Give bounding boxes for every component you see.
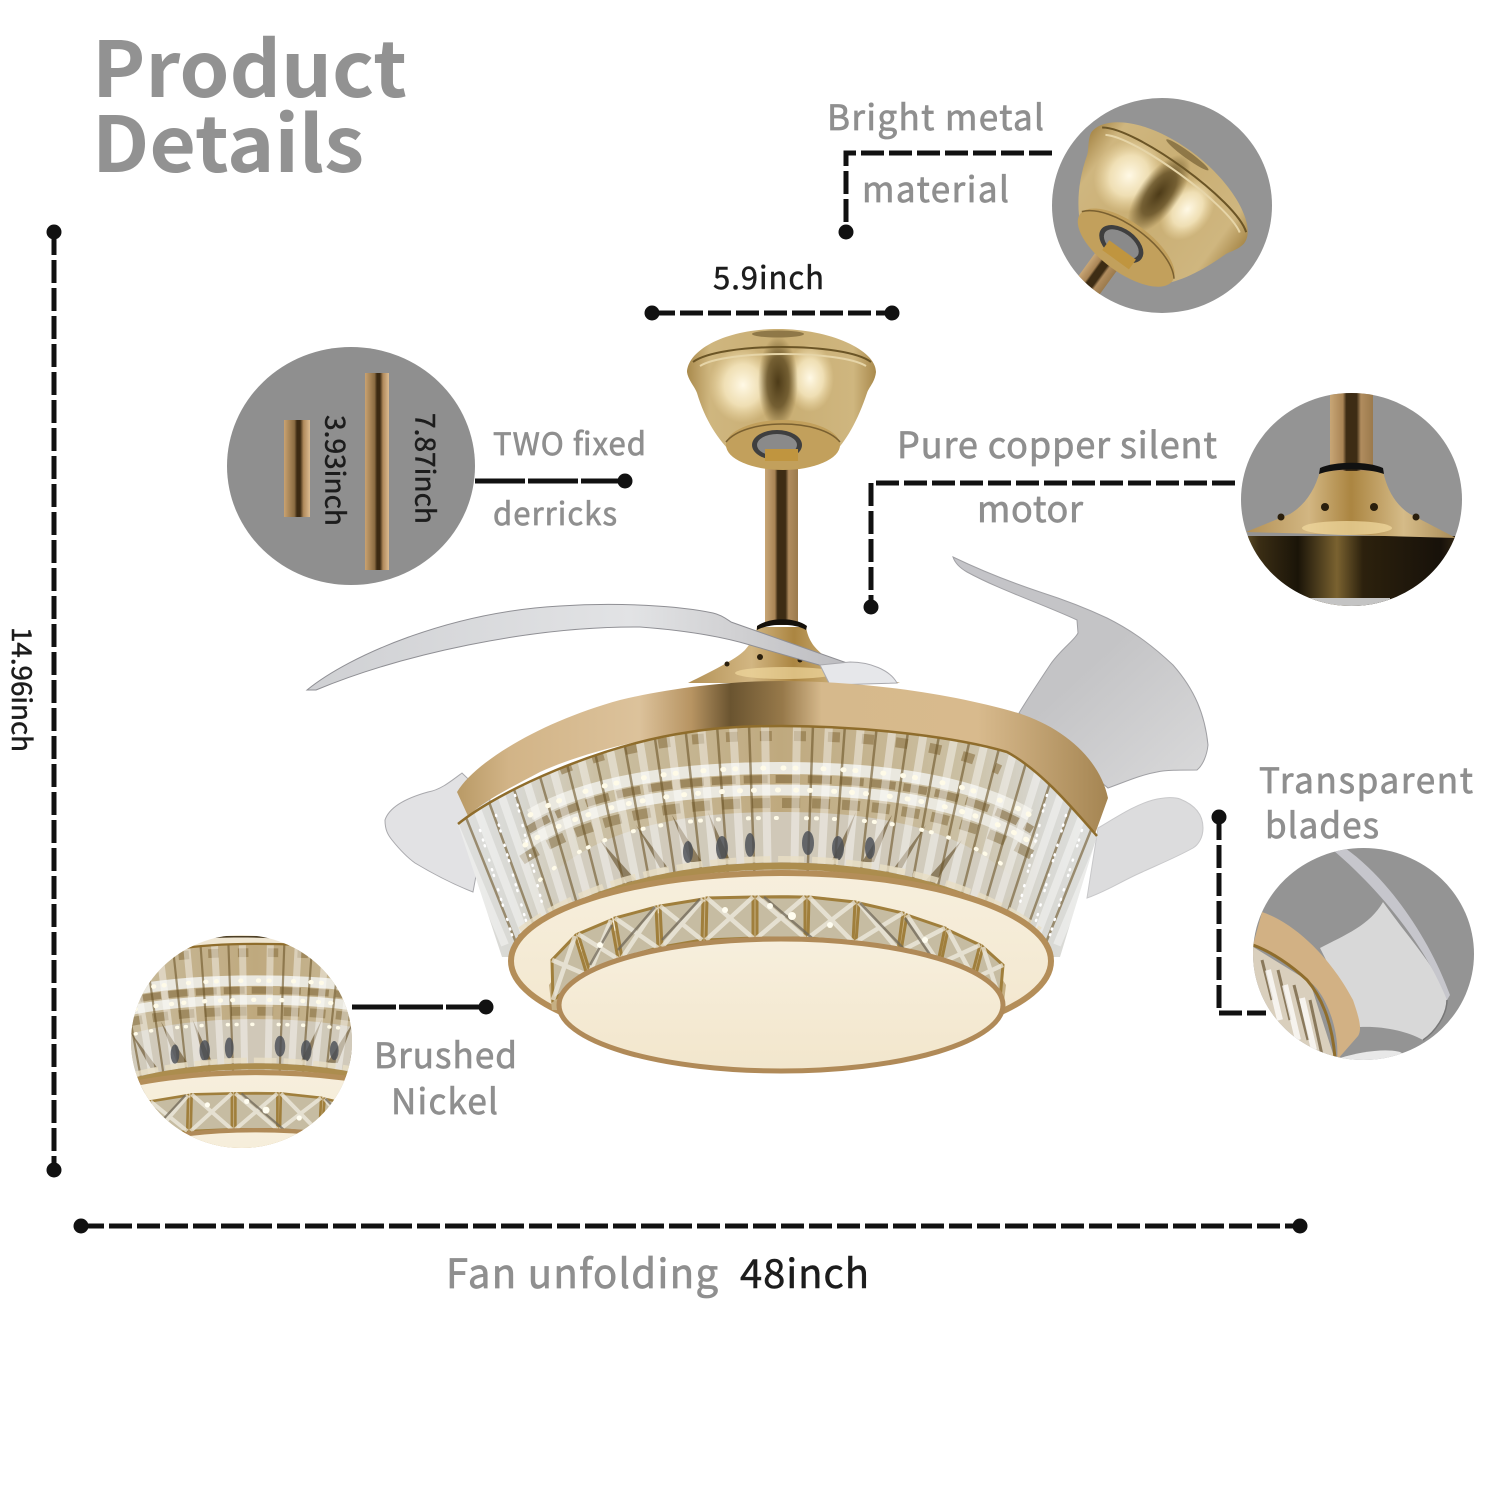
callout: pure copper silent motor <box>864 393 1462 614</box>
label: Brushed <box>374 1028 517 1079</box>
label: TWO fixed <box>493 419 646 464</box>
frosted light ring <box>511 873 1051 1049</box>
title: Product Details: Details <box>92 84 364 195</box>
title: Product Details <box>92 9 407 195</box>
detail circle: downrods: 3.93inch <box>318 415 356 526</box>
leader line <box>838 153 1052 240</box>
downrod <box>765 445 798 625</box>
detail circle: downrods <box>227 347 475 585</box>
blade: right top <box>953 557 1208 788</box>
label: motor <box>977 481 1084 533</box>
square crystal ring <box>549 895 1006 1010</box>
label: canopy width: 5.9inch <box>713 253 824 298</box>
leader line <box>864 483 1235 614</box>
canopy dome <box>687 329 876 470</box>
callout: brushed nickel <box>131 935 514 1148</box>
label: fan unfolding width: Fan unfolding <box>446 1242 718 1300</box>
label: material <box>862 162 1009 213</box>
leader line <box>475 474 632 488</box>
detail circle: crystals <box>131 935 352 1148</box>
callout: two fixed derricks <box>227 347 646 585</box>
label: fan unfolding width: 48inch <box>740 1242 869 1300</box>
callout: bright metal material <box>827 90 1272 322</box>
label <box>493 419 646 534</box>
leader line <box>352 1000 494 1014</box>
label <box>374 1028 517 1125</box>
motor housing <box>688 619 900 683</box>
canopy width dimension line <box>644 306 900 320</box>
blade: right lower <box>1087 798 1203 898</box>
ceiling fan <box>307 329 1208 1071</box>
callout: transparent blades <box>1212 753 1474 1064</box>
label: fan unfolding width <box>446 1242 869 1300</box>
label: derricks <box>493 489 617 534</box>
clear blade hub <box>820 662 897 685</box>
label <box>1259 753 1473 849</box>
label: Bright metal <box>827 90 1044 141</box>
bottom light disc <box>559 939 1003 1071</box>
label <box>827 90 1044 213</box>
label: Transparent <box>1259 753 1473 804</box>
leader line <box>1212 810 1266 1013</box>
blade: left lower <box>385 773 490 892</box>
title: Product Details: Product <box>92 9 407 120</box>
label <box>897 417 1217 533</box>
width dimension line <box>74 1218 1308 1234</box>
detail circle: blade <box>1250 848 1474 1064</box>
height label: 14.96inch <box>4 627 43 752</box>
crystal body and light <box>397 715 1165 1071</box>
detail circle: motor <box>1241 393 1462 606</box>
blade: left top <box>307 604 847 690</box>
label: Pure copper silent <box>897 417 1217 469</box>
height dimension line <box>46 224 62 1178</box>
prism crystals <box>397 715 1165 960</box>
detail circle: downrods: 7.87inch <box>408 413 446 524</box>
label: Nickel <box>391 1074 498 1125</box>
label: blades <box>1265 798 1379 849</box>
gold band <box>457 681 1108 834</box>
detail circle: canopy <box>1052 98 1272 313</box>
